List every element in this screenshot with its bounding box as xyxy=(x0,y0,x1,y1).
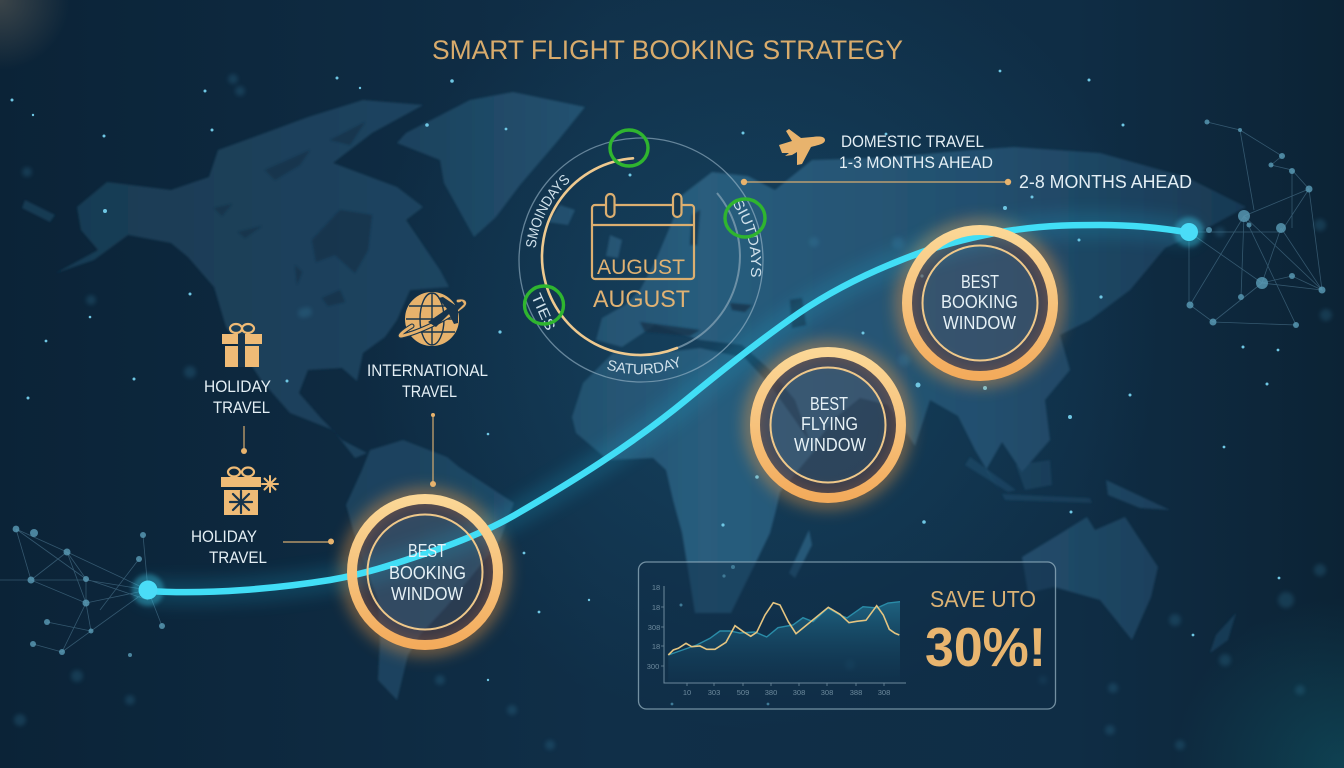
path end node xyxy=(1174,217,1204,247)
line chart: 18 xyxy=(652,603,660,612)
path start node xyxy=(132,574,164,606)
domestic travel text: 1-3 MONTHS AHEAD xyxy=(839,153,993,172)
ring: best booking window right: BOOKING xyxy=(941,291,1018,312)
month label: AUGUST xyxy=(593,286,690,313)
timeline connector xyxy=(741,179,1011,185)
line chart xyxy=(647,583,906,697)
line chart: 509 xyxy=(737,688,749,697)
icon: gift with snowflake xyxy=(221,468,278,515)
ring: best booking window right xyxy=(907,230,1053,376)
line chart: 308 xyxy=(821,688,833,697)
ring: best flying window xyxy=(755,352,901,498)
ring: best booking window left: BOOKING xyxy=(389,562,466,583)
icon: calendar xyxy=(592,194,694,279)
holiday travel label 2 xyxy=(191,527,267,567)
icon: airplane xyxy=(779,129,825,165)
savings percentage: 30%! xyxy=(925,616,1046,678)
line chart: 18 xyxy=(652,583,660,592)
panel: savings xyxy=(638,562,1056,709)
weekday labels xyxy=(526,175,762,374)
star particles xyxy=(10,70,1280,705)
green highlight circles xyxy=(524,130,765,324)
international travel label xyxy=(367,361,488,401)
calendar month: AUGUST xyxy=(597,256,685,279)
international travel label: INTERNATIONAL xyxy=(367,361,488,380)
line chart: 303 xyxy=(708,688,720,697)
connector: holiday xyxy=(241,426,247,454)
weekday labels: SIUTDAYS xyxy=(734,201,762,277)
line chart: 300 xyxy=(647,662,659,671)
ring: best booking window left: BEST xyxy=(408,540,446,561)
international travel label: TRAVEL xyxy=(402,382,457,401)
ring: best flying window: FLYING xyxy=(801,413,858,434)
weekday labels: SMOINDAYS xyxy=(526,175,570,248)
ring: best booking window right: WINDOW xyxy=(943,312,1016,333)
network: right xyxy=(1186,120,1326,328)
ring glows and translucent fills xyxy=(349,227,1056,648)
network: left xyxy=(0,526,165,657)
ring: best booking window right: BEST xyxy=(961,271,999,292)
ring: best flying window: BEST xyxy=(810,393,848,414)
line chart: 380 xyxy=(765,688,777,697)
holiday travel label 1: HOLIDAY xyxy=(204,377,271,396)
line chart: 388 xyxy=(850,688,862,697)
holiday travel label 1 xyxy=(204,377,271,417)
connector: international xyxy=(430,413,436,487)
calendar dial xyxy=(518,128,767,383)
save label: SAVE UTO xyxy=(930,586,1036,612)
international lead time text: 2-8 MONTHS AHEAD xyxy=(1019,172,1192,192)
ring: best booking window left xyxy=(352,499,498,645)
icon: gift xyxy=(222,324,262,367)
holiday travel label 2: HOLIDAY xyxy=(191,527,257,546)
weekday labels: TIES xyxy=(527,291,558,333)
line chart: 18 xyxy=(652,642,660,651)
flight path line xyxy=(148,225,1186,592)
dial rings xyxy=(519,138,763,382)
title: SMART FLIGHT BOOKING STRATEGY xyxy=(432,35,903,65)
line chart: 308 xyxy=(793,688,805,697)
ring: best flying window: WINDOW xyxy=(794,434,866,455)
map water details xyxy=(214,122,806,336)
line chart: 308 xyxy=(648,623,660,632)
ring: best booking window left: WINDOW xyxy=(391,583,463,604)
line chart: 10 xyxy=(683,688,691,697)
domestic travel text xyxy=(839,132,993,172)
world map xyxy=(22,92,1246,700)
holiday travel label 2: TRAVEL xyxy=(209,548,267,567)
icon: globe with plane xyxy=(400,293,465,345)
line chart: 308 xyxy=(878,688,890,697)
domestic travel text: DOMESTIC TRAVEL xyxy=(841,132,984,151)
connector: holiday to ring xyxy=(283,538,334,544)
weekday labels: SATURDAY xyxy=(607,356,679,374)
holiday travel label 1: TRAVEL xyxy=(213,398,270,417)
